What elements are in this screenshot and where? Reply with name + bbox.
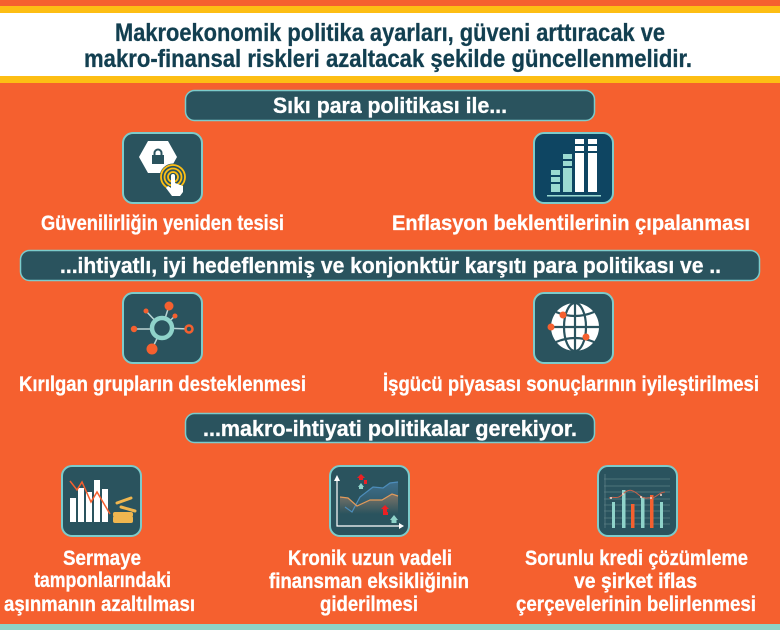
label: anchoring inflation expectations: Enflasyon beklentilerinin çıpalanması bbox=[392, 212, 750, 235]
label: restoring credibility: Güvenilirliğin yeniden tesisi bbox=[41, 212, 284, 235]
heading: tight monetary policy: Sıkı para politikası ile... bbox=[273, 93, 507, 118]
label: reducing erosion of capital buffers: aşınmanın azaltılması bbox=[4, 593, 195, 616]
label: reducing erosion of capital buffers: Sermaye bbox=[63, 547, 141, 570]
label: NPL resolution and insolvency frameworks bbox=[516, 547, 756, 616]
icon: globe bbox=[534, 293, 613, 363]
heading: macroprudential policies: ...makro-ihtiyati politikalar gerekiyor. bbox=[203, 416, 577, 441]
icon: falling bars and coins bbox=[62, 466, 141, 536]
label: addressing chronic long-term financing shortfall: Kronik uzun vadeli bbox=[288, 547, 452, 570]
label: reducing erosion of capital buffers: tamponlarındaki bbox=[34, 569, 171, 592]
label: addressing chronic long-term financing shortfall: finansman eksikliğinin bbox=[269, 570, 469, 593]
icon: financial chart bbox=[330, 466, 409, 536]
label: NPL resolution and insolvency frameworks: Sorunlu kredi çözümleme bbox=[525, 547, 748, 570]
label: addressing chronic long-term financing shortfall: giderilmesi bbox=[320, 593, 418, 616]
title: makro-finansal riskleri azaltacak şekilde güncellenmelidir. bbox=[84, 45, 692, 73]
label: reducing erosion of capital buffers bbox=[4, 547, 195, 616]
icon: bars and line chart bbox=[598, 466, 677, 536]
icon: network node bbox=[123, 293, 202, 363]
header band bbox=[0, 6, 780, 83]
label: NPL resolution and insolvency frameworks: çerçevelerinin belirlenmesi bbox=[516, 593, 756, 616]
heading: prudent targeted policy: ...ihtiyatlı, iyi hedeflenmiş ve konjonktür karşıtı para politikası ve .. bbox=[60, 253, 721, 278]
title: Makroekonomik politika ayarları, güveni arttıracak ve bbox=[115, 19, 665, 47]
footer band bbox=[0, 624, 780, 630]
icon: lock and touch bbox=[123, 133, 202, 203]
icon: stacked bars bbox=[534, 133, 613, 203]
label: supporting vulnerable groups: Kırılgan grupların desteklenmesi bbox=[19, 373, 306, 396]
title bbox=[84, 19, 692, 73]
heading: tight monetary policy bbox=[186, 90, 594, 120]
label: addressing chronic long-term financing shortfall bbox=[269, 547, 469, 616]
label: NPL resolution and insolvency frameworks: ve şirket iflas bbox=[574, 570, 697, 593]
